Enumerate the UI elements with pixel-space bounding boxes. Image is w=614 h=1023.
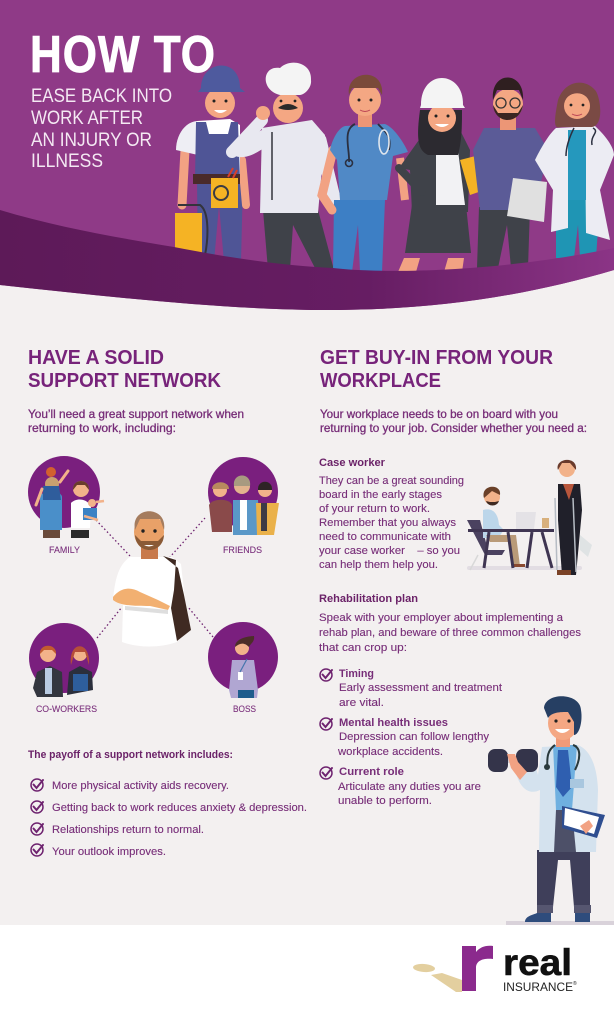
intro: support network: You’ll need a great support network when: [28, 407, 244, 421]
text: rehabilitation plan: [319, 612, 581, 654]
heading: support network: [28, 347, 222, 392]
intro: workplace: returning to your job. Consider whether you need a:: [320, 421, 587, 435]
central man: [113, 511, 191, 646]
logo: real insurance: [413, 942, 577, 994]
item: current role: Articulate any duties you are: [338, 781, 481, 793]
illustration: bearded man: [473, 78, 548, 268]
illustration: doctor: [535, 83, 614, 258]
text: case worker: board in the early stages: [319, 489, 443, 501]
heading: workplace: WORKPLACE: [320, 370, 441, 392]
item: timing: Timing: [339, 668, 374, 680]
connecting dotted lines: [96, 518, 213, 638]
text: rehabilitation plan: Speak with your employer about implementing a: [319, 612, 564, 624]
subtitle: WORK AFTER: [31, 108, 143, 129]
illustration: doctor with dumbbell: [488, 696, 614, 925]
illustration: businesswoman: [398, 78, 493, 272]
text: case worker: can help them help you.: [319, 559, 438, 571]
text: case worker: need to communicate with: [319, 531, 451, 543]
subheading: payoff: The payoff of a support network includes:: [28, 749, 233, 761]
item: timing: [320, 668, 502, 709]
item: timing: Early assessment and treatment: [339, 682, 502, 694]
item: timing: are vital.: [339, 697, 384, 709]
intro: workplace: Your workplace needs to be on board with you: [320, 407, 558, 421]
heading: workplace: [320, 347, 554, 392]
footer: [0, 925, 614, 1023]
checklist: payoff: Getting back to work reduces anxiety & depression.: [52, 802, 307, 814]
text: rehabilitation plan: rehab plan, and beware of three common challenges: [319, 627, 581, 639]
item: mental health issues: Depression can follow lengthy: [339, 731, 490, 743]
header banner: [0, 0, 614, 310]
heading: workplace: GET BUY-IN FROM YOUR: [320, 347, 554, 369]
label: boss: BOSS: [233, 704, 256, 715]
circle: friends: [208, 457, 279, 535]
text: case worker: [319, 475, 464, 571]
text: case worker: Remember that you always: [319, 517, 457, 529]
illustration: nurse: [322, 75, 408, 272]
illustration: tradesperson: [175, 65, 246, 262]
heading: support network: HAVE A SOLID: [28, 347, 164, 369]
item: mental health issues: [320, 717, 490, 758]
subtitle: [31, 86, 172, 172]
checklist: payoff: Your outlook improves.: [52, 846, 166, 858]
item: current role: Current role: [339, 766, 404, 778]
checklist: payoff: Relationships return to normal.: [52, 824, 204, 836]
illustration: case worker and injured employee: [467, 460, 592, 575]
item: current role: [320, 766, 481, 807]
intro: support network: returning to work, including:: [28, 421, 176, 435]
dark wave: [0, 210, 614, 310]
logo: real insurance: ®: [573, 980, 577, 987]
subheading: case worker: Case worker: [319, 457, 386, 469]
title: how to: HOW TO: [30, 27, 215, 84]
checklist: payoff: [31, 779, 307, 858]
item: mental health issues: workplace accidents.: [337, 746, 443, 758]
text: case worker: your case worker – so you: [319, 545, 460, 557]
text: rehabilitation plan: that can crop up:: [319, 642, 407, 654]
label: friends: FRIENDS: [223, 545, 262, 556]
subheading: rehabilitation plan: Rehabilitation plan: [319, 593, 418, 605]
item: current role: unable to perform.: [338, 795, 432, 807]
heading: support network: SUPPORT NETWORK: [28, 370, 222, 392]
subtitle: ILLNESS: [31, 151, 103, 172]
intro: workplace: [320, 407, 587, 435]
label: family: FAMILY: [49, 545, 81, 556]
logo: real insurance: real: [503, 942, 572, 983]
circle: boss: [208, 622, 278, 698]
checklist: payoff: More physical activity aids recovery.: [52, 780, 229, 792]
item: mental health issues: Mental health issues: [339, 717, 448, 729]
circle: co-workers: [29, 623, 99, 697]
text: case worker: of your return to work.: [319, 503, 430, 515]
subtitle: EASE BACK INTO: [31, 86, 172, 107]
text: case worker: They can be a great sounding: [319, 475, 464, 487]
circle: family: [28, 456, 104, 538]
logo: real insurance: INSURANCE: [503, 982, 573, 994]
illustration: chef: [231, 63, 334, 270]
subtitle: AN INJURY OR: [31, 130, 152, 151]
intro: support network: [28, 407, 244, 435]
label: co-workers: CO-WORKERS: [36, 704, 97, 715]
